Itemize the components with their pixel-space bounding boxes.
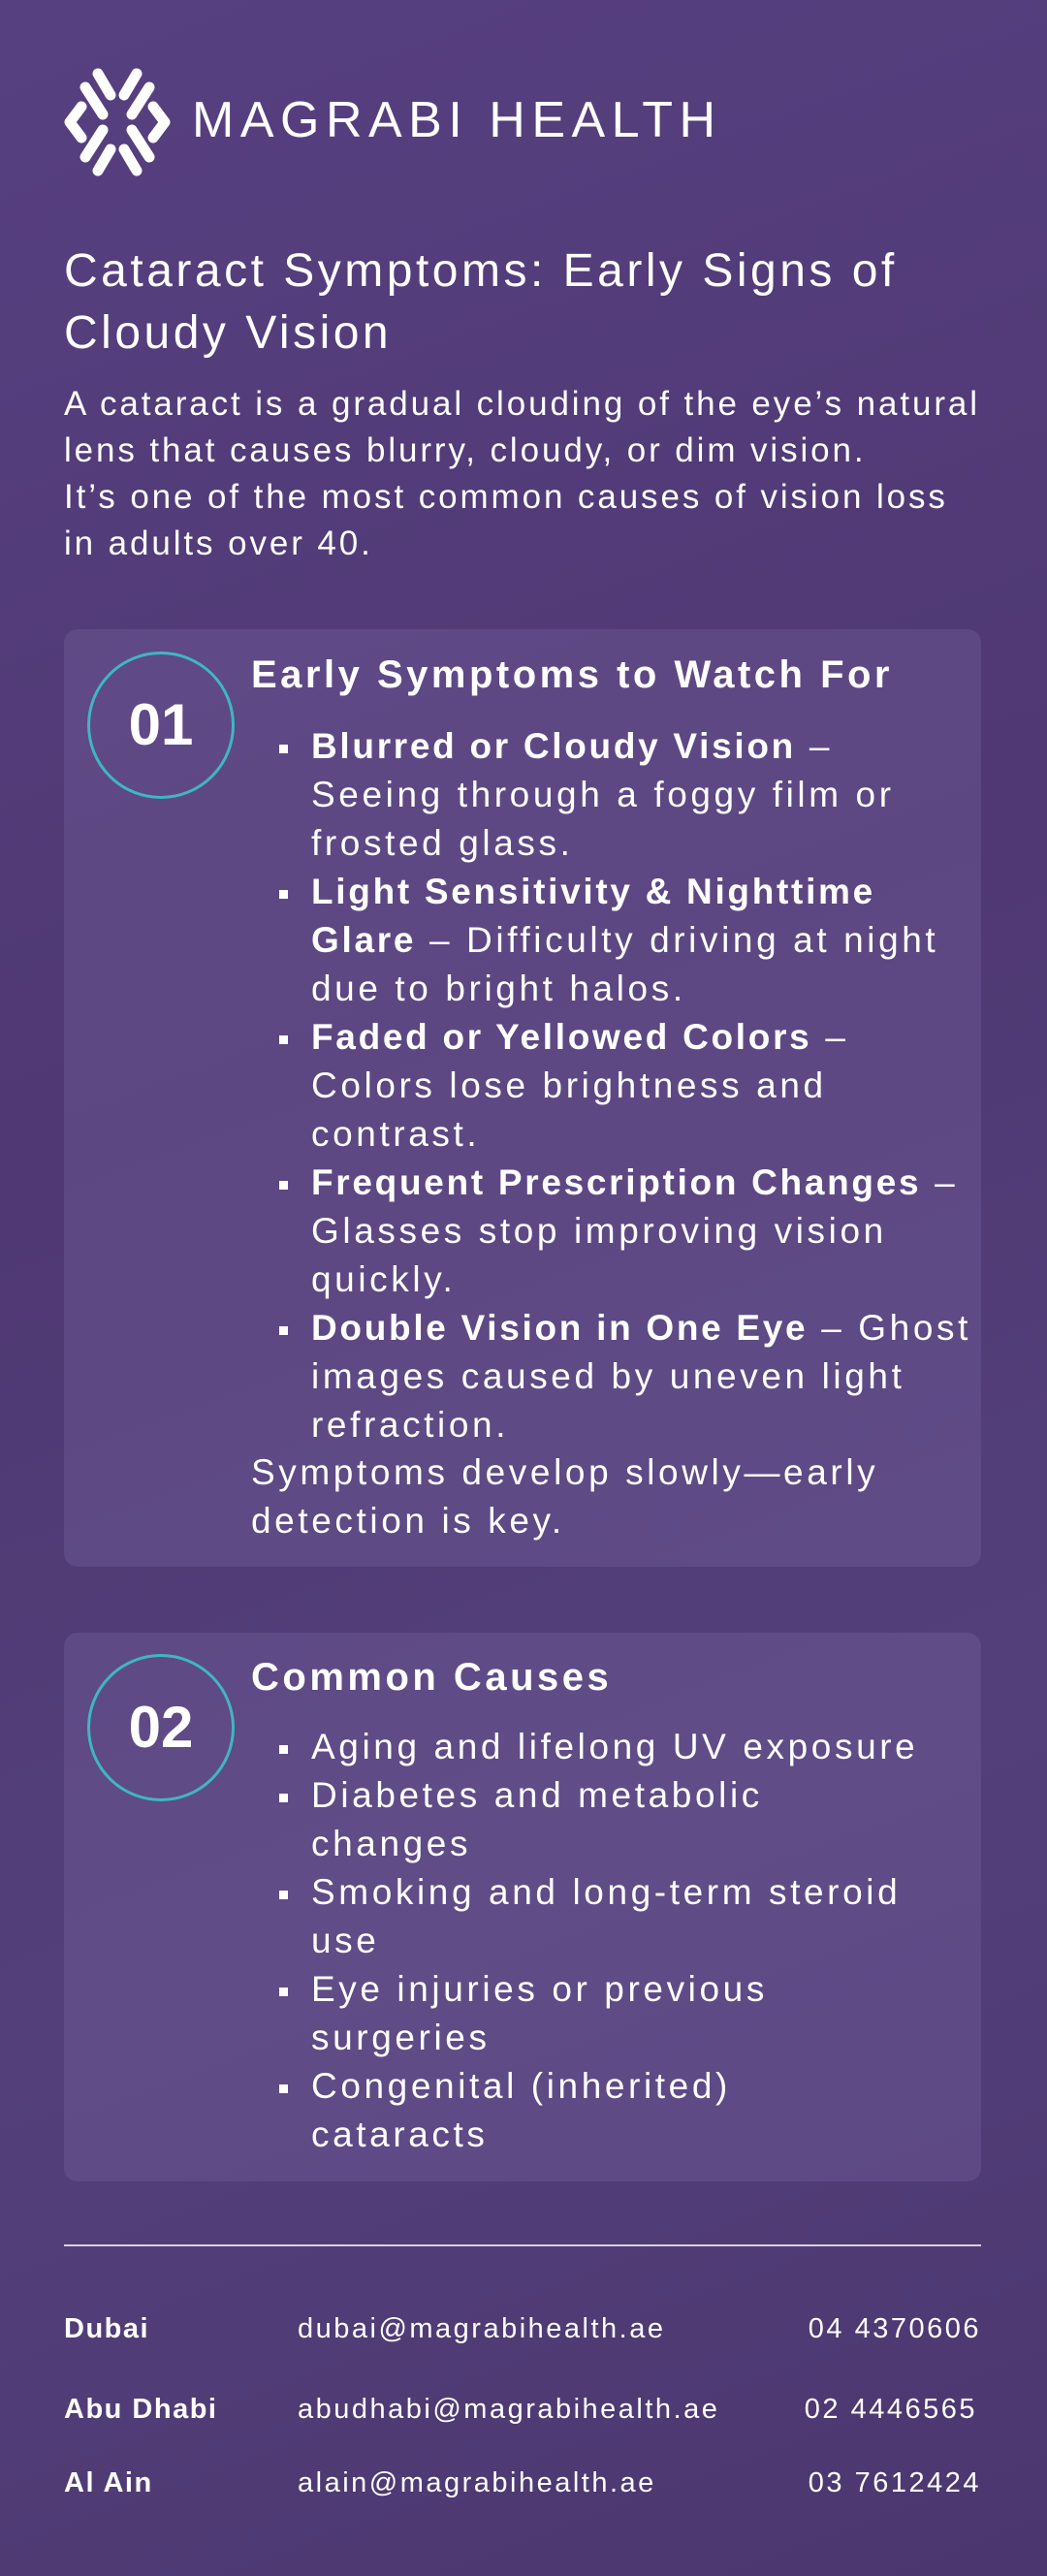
symptoms list: quickly. xyxy=(311,1259,456,1299)
contact: Al Ain: alain@magrabihealth.ae xyxy=(298,2467,656,2498)
intro text: lens that causes blurry, cloudy, or dim vision. xyxy=(64,431,867,469)
causes list: Diabetes and metabolic xyxy=(311,1775,763,1815)
causes list: Aging and lifelong UV exposure xyxy=(311,1727,918,1766)
symptoms list: Blurred or Cloudy Vision – xyxy=(311,726,833,766)
causes list: Eye injuries or previous xyxy=(311,1969,768,2009)
causes list: use xyxy=(311,1921,379,1960)
symptoms list: Double Vision in One Eye – Ghost xyxy=(311,1308,971,1348)
symptoms list: Frequent Prescription Changes – xyxy=(311,1162,958,1202)
intro text: A cataract is a gradual clouding of the eye’s natural xyxy=(64,385,980,423)
icon: logo mark xyxy=(64,68,171,176)
contact: Abu Dhabi xyxy=(64,2394,977,2425)
symptoms note: Symptoms develop slowly—early xyxy=(251,1452,878,1492)
symptoms list: refraction. xyxy=(311,1405,509,1445)
intro text: It’s one of the most common causes of vision loss xyxy=(64,478,948,516)
number badge 02 xyxy=(87,1654,235,1801)
contact: Abu Dhabi: Abu Dhabi xyxy=(64,2394,217,2425)
heading: common causes: Common Causes xyxy=(251,1656,612,1699)
contacts xyxy=(64,2313,981,2498)
panel: early symptoms xyxy=(64,629,981,1567)
symptoms list: Glasses stop improving vision xyxy=(311,1211,887,1251)
symptoms note xyxy=(251,1452,878,1541)
symptoms list: contrast. xyxy=(311,1114,480,1154)
title: Cataract Symptoms: Early Signs of xyxy=(64,245,898,297)
causes list: cataracts xyxy=(311,2115,489,2154)
contact: Dubai xyxy=(64,2313,981,2344)
symptoms list xyxy=(279,726,971,1445)
title: Cloudy Vision xyxy=(64,307,392,359)
symptoms list: Glare – Difficulty driving at night xyxy=(311,920,938,960)
symptoms list: frosted glass. xyxy=(311,823,573,863)
number badge 01: 01 xyxy=(129,692,193,757)
panel: common causes xyxy=(64,1633,981,2181)
contact: Abu Dhabi: abudhabi@magrabihealth.ae xyxy=(298,2394,719,2425)
contact: Dubai: dubai@magrabihealth.ae xyxy=(298,2313,665,2344)
causes list: surgeries xyxy=(311,2018,491,2057)
symptoms list: Seeing through a foggy film or xyxy=(311,775,895,814)
brand name: MAGRABI HEALTH xyxy=(192,92,722,148)
contact: Al Ain: 03 7612424 xyxy=(809,2467,981,2498)
symptoms list: Faded or Yellowed Colors – xyxy=(311,1017,849,1057)
contact: Dubai: Dubai xyxy=(64,2313,149,2344)
symptoms list: Colors lose brightness and xyxy=(311,1065,827,1105)
symptoms note: detection is key. xyxy=(251,1501,565,1541)
symptoms list: Light Sensitivity & Nighttime xyxy=(311,872,875,911)
title xyxy=(64,245,898,359)
heading: early symptoms: Early Symptoms to Watch For xyxy=(251,653,893,696)
intro text: in adults over 40. xyxy=(64,525,373,562)
contact: Dubai: 04 4370606 xyxy=(809,2313,981,2344)
contact: Abu Dhabi: 02 4446565 xyxy=(805,2394,977,2425)
symptoms list: images caused by uneven light xyxy=(311,1356,904,1396)
causes list: Smoking and long-term steroid xyxy=(311,1872,901,1912)
contact: Al Ain: Al Ain xyxy=(64,2467,153,2498)
causes list xyxy=(279,1727,918,2154)
causes list: changes xyxy=(311,1824,471,1863)
symptoms list: due to bright halos. xyxy=(311,969,686,1008)
contact: Al Ain xyxy=(64,2467,981,2498)
number badge 01 xyxy=(87,652,235,799)
intro text xyxy=(64,385,980,562)
number badge 02: 02 xyxy=(129,1695,193,1760)
logo xyxy=(64,68,722,176)
causes list: Congenital (inherited) xyxy=(311,2066,731,2106)
